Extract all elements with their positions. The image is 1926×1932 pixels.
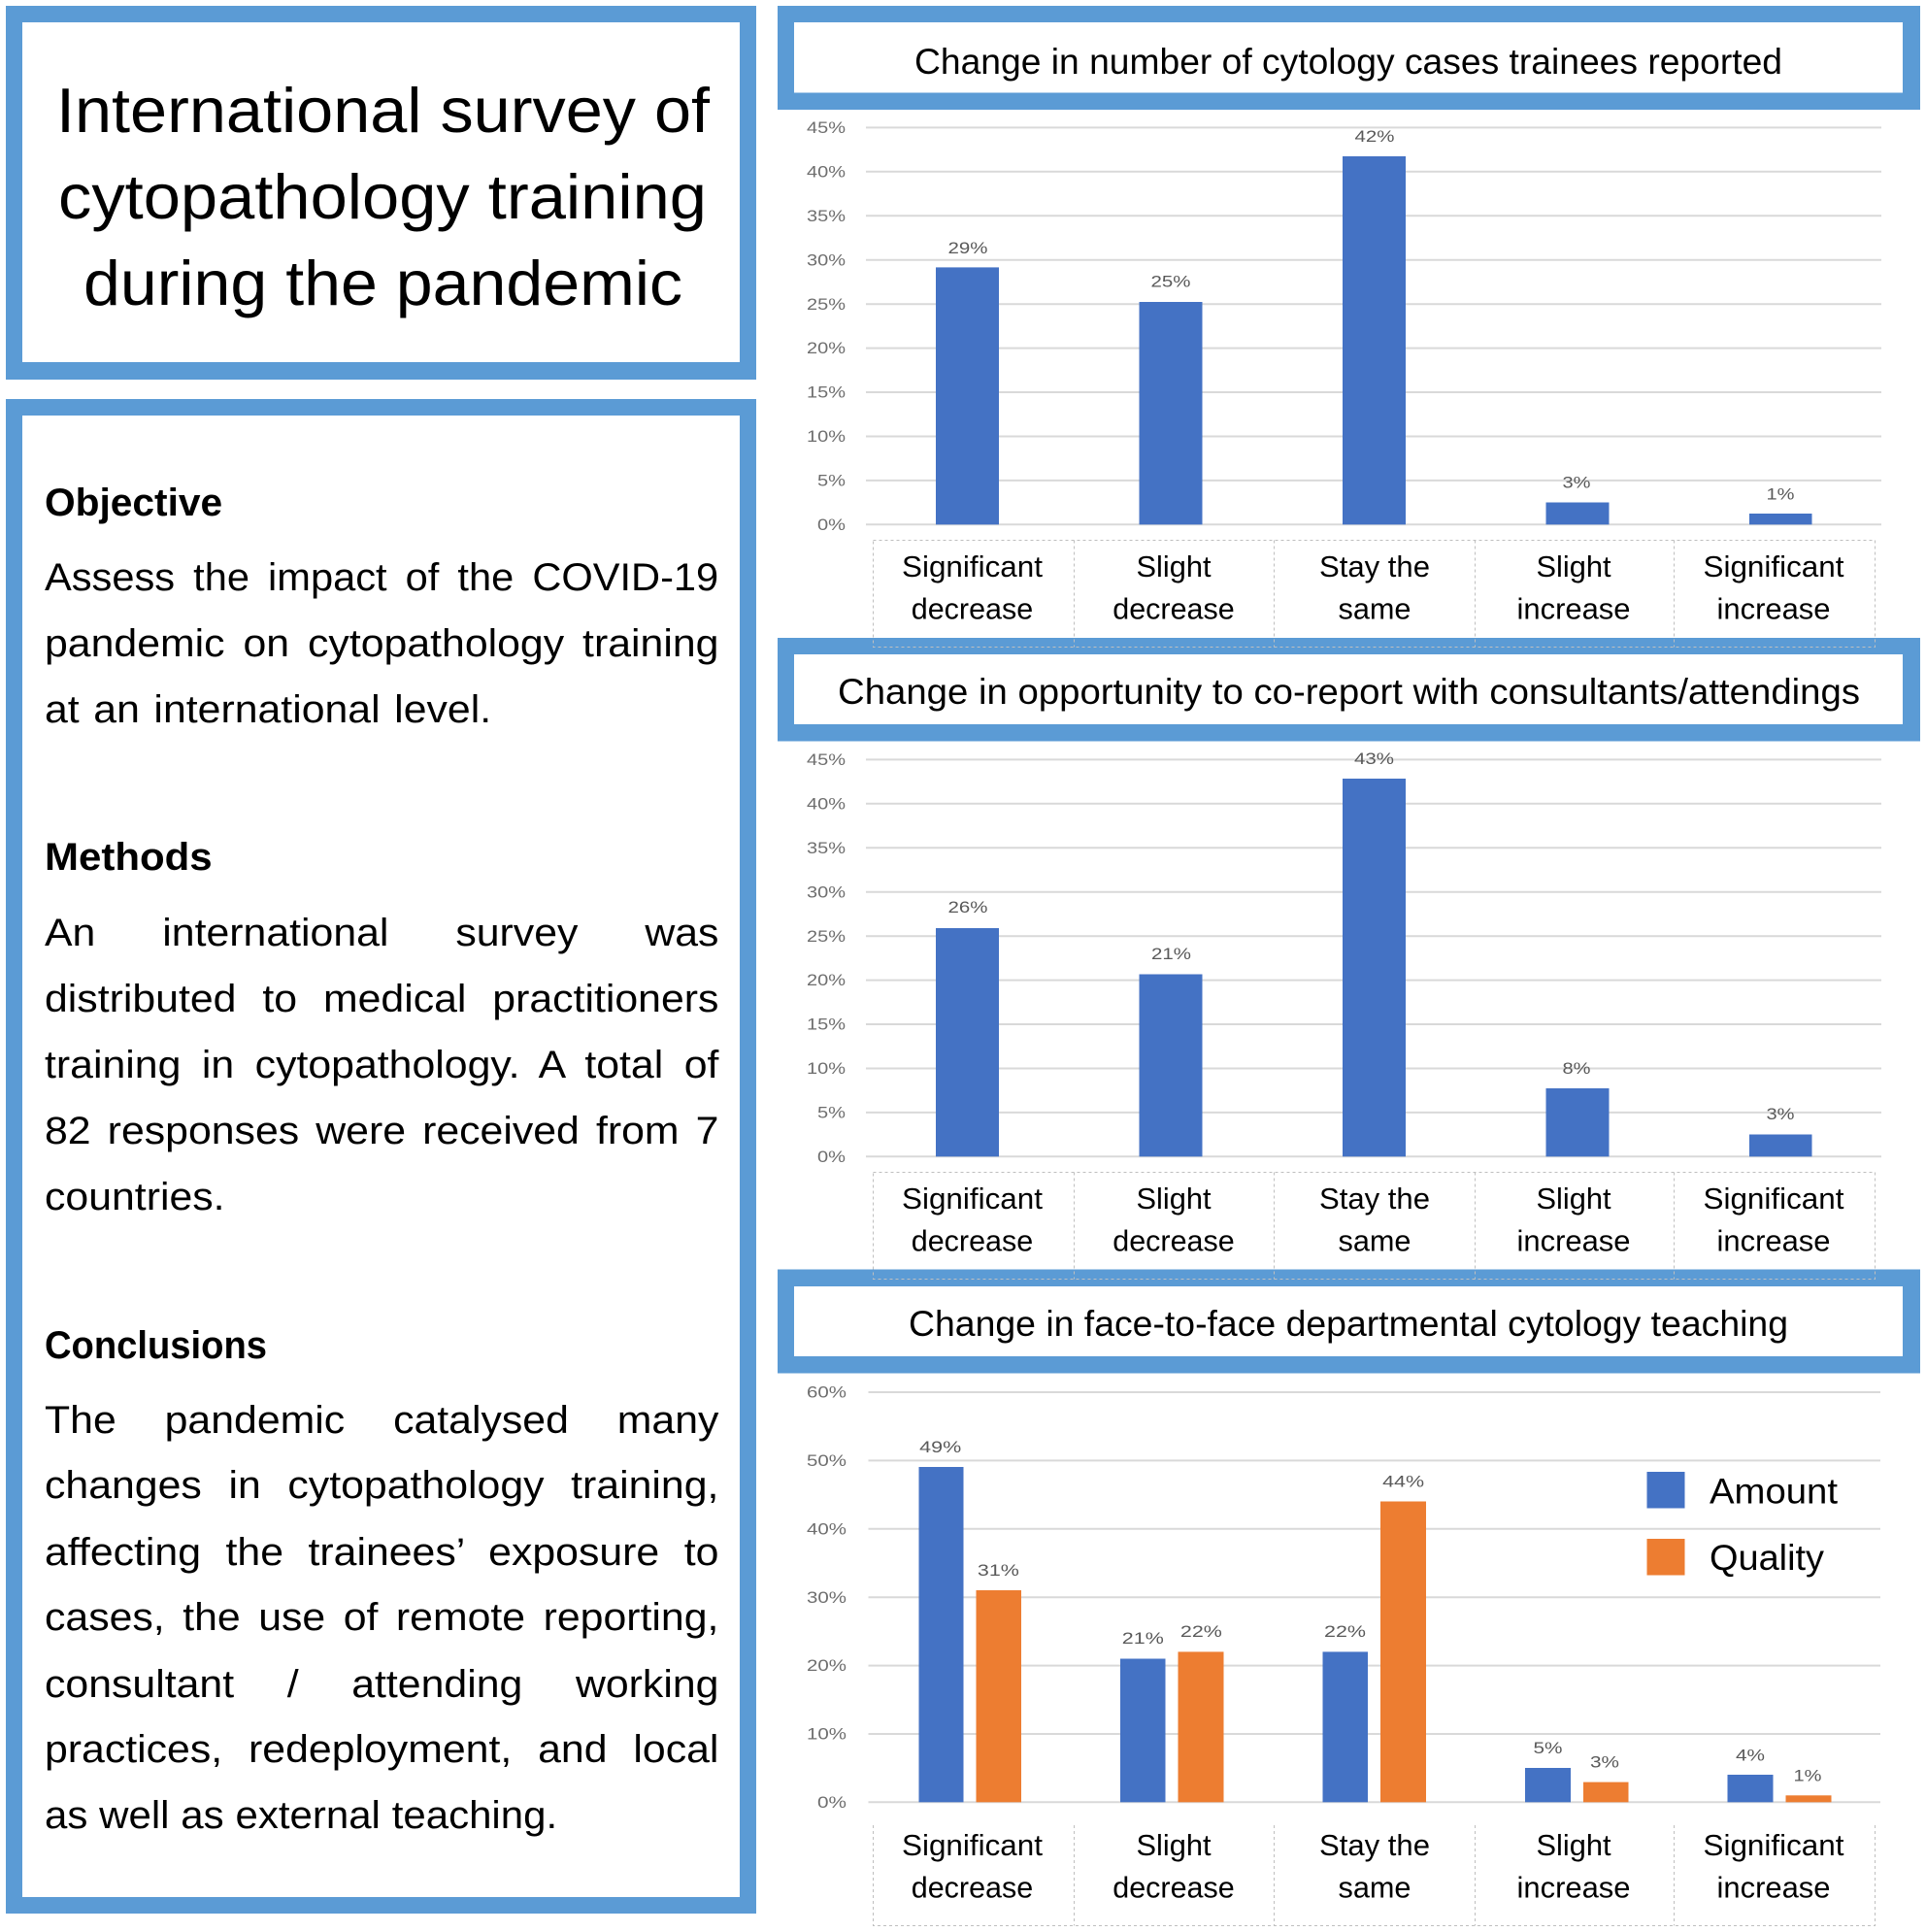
bar chart: face-to-face teaching amount and quality: 40% (807, 1519, 847, 1538)
bar chart: opportunity to co-report: decrease (1112, 1223, 1235, 1258)
header: chart 3 title (778, 1270, 1920, 1373)
text: methods body: training in cytopathology. A total of (45, 1044, 718, 1086)
bar chart: opportunity to co-report: 26% (947, 898, 988, 916)
bar chart: number of cytology cases: same (1338, 592, 1411, 625)
header: chart 1 title (778, 6, 1920, 110)
panel: title (6, 6, 756, 380)
heading: methods: Methods (45, 836, 212, 879)
bar chart: face-to-face teaching amount and quality: same (1338, 1870, 1411, 1905)
bar chart: number of cytology cases: 15% (807, 383, 846, 402)
bar chart: number of cytology cases: 35% (807, 207, 846, 225)
text: objective body: pandemic on cytopathology training (45, 622, 718, 665)
header: chart 1 title: Change in number of cytology cases trainees reported (914, 42, 1782, 82)
title: International survey of (56, 75, 711, 146)
bar chart: number of cytology cases: 40% (807, 162, 846, 181)
bar chart: face-to-face teaching amount and quality: increase (1716, 1870, 1831, 1905)
bar chart: opportunity to co-report: Significant (1703, 1182, 1844, 1216)
bar chart: opportunity to co-report: 25% (807, 927, 846, 946)
bar chart: face-to-face teaching amount and quality: Stay the (1319, 1828, 1430, 1862)
bar chart: opportunity to co-report: same (1338, 1223, 1411, 1258)
text: methods body: distributed to medical practitioners (45, 978, 718, 1020)
bar chart: number of cytology cases: 3% (1563, 474, 1590, 491)
bar chart: number of cytology cases: 10% (807, 427, 846, 446)
text: objective body: at an international level. (45, 688, 491, 731)
bar chart: opportunity to co-report: Stay the (1319, 1182, 1430, 1216)
bar chart: number of cytology cases: 29% (947, 239, 988, 257)
bar chart: face-to-face teaching amount and quality: 3% (1590, 1753, 1619, 1771)
bar chart: face-to-face teaching amount and quality: Significant (902, 1828, 1043, 1862)
bar chart: number of cytology cases: 45% (807, 118, 846, 137)
bar chart: number of cytology cases: Slight (1136, 550, 1212, 583)
bar chart: opportunity to co-report: 35% (807, 839, 846, 857)
bar chart: opportunity to co-report: 5% (817, 1103, 846, 1122)
bar chart: opportunity to co-report: 43% (1354, 749, 1394, 768)
bar chart: number of cytology cases: 42% (1355, 127, 1394, 146)
bar chart: face-to-face teaching amount and quality: 49% (919, 1438, 961, 1456)
bar chart: number of cytology cases: decrease (1112, 592, 1235, 625)
bar chart: face-to-face teaching amount and quality (807, 1382, 1880, 1926)
bar chart: face-to-face teaching amount and quality: 1% (1794, 1767, 1821, 1784)
bar chart: face-to-face teaching amount and quality: Slight (1536, 1828, 1611, 1862)
header: chart 2 title (778, 638, 1920, 742)
bar chart: face-to-face teaching amount and quality: 31% (978, 1561, 1019, 1580)
bar chart: opportunity to co-report: 3% (1767, 1105, 1794, 1123)
heading: conclusions: Conclusions (45, 1324, 266, 1367)
text: conclusions body: The pandemic catalysed many (45, 1399, 718, 1442)
bar chart: opportunity to co-report: 0% (817, 1148, 846, 1166)
text: conclusions body: affecting the trainees’ exposure to (45, 1531, 718, 1574)
section: conclusions (45, 1324, 718, 1837)
bar chart: number of cytology cases: 20% (807, 339, 846, 357)
bar chart: face-to-face teaching amount and quality: Slight (1136, 1828, 1212, 1862)
title (56, 75, 711, 318)
text: objective body (45, 556, 718, 731)
bar chart: opportunity to co-report (807, 749, 1881, 1280)
bar chart: face-to-face teaching amount and quality: 44% (1382, 1472, 1424, 1491)
bar chart: opportunity to co-report: 30% (807, 883, 846, 901)
heading: objective: Objective (45, 482, 222, 524)
header: chart 2 title: Change in opportunity to co-report with consultants/attendings (838, 672, 1860, 712)
legend: Quality (1710, 1538, 1825, 1578)
text: objective body: Assess the impact of the COVID-19 (45, 556, 718, 599)
header: chart 3 title: Change in face-to-face departmental cytology teaching (909, 1304, 1788, 1344)
text: methods body: An international survey was (45, 912, 718, 954)
bar chart: number of cytology cases: increase (1716, 592, 1831, 625)
bar chart: face-to-face teaching amount and quality: 4% (1736, 1746, 1765, 1765)
bar chart: number of cytology cases (807, 118, 1881, 647)
bar chart: face-to-face teaching amount and quality: 10% (807, 1725, 847, 1744)
bar chart: number of cytology cases: decrease (912, 592, 1033, 625)
bar chart: number of cytology cases: Stay the (1319, 550, 1430, 583)
bar chart: face-to-face teaching amount and quality: 30% (807, 1588, 847, 1607)
bar chart: number of cytology cases: Slight (1536, 550, 1611, 583)
text: methods body: 82 responses were received from 7 (45, 1110, 718, 1152)
text: methods body (45, 912, 718, 1218)
bar chart: number of cytology cases: increase (1516, 592, 1631, 625)
text: conclusions body: as well as external teaching. (45, 1794, 557, 1837)
bar chart: opportunity to co-report: increase (1716, 1223, 1831, 1258)
bar chart: number of cytology cases: 1% (1767, 485, 1794, 503)
text: conclusions body: practices, redeployment, and local (45, 1728, 718, 1771)
bar chart: face-to-face teaching amount and quality: 60% (807, 1382, 847, 1402)
bar chart: opportunity to co-report: 8% (1563, 1059, 1590, 1078)
bar chart: number of cytology cases: 25% (1151, 272, 1190, 291)
section: objective (45, 482, 718, 731)
bar chart: face-to-face teaching amount and quality: increase (1516, 1870, 1631, 1905)
section: methods (45, 836, 718, 1218)
bar chart: opportunity to co-report: decrease (912, 1223, 1033, 1258)
bar chart: number of cytology cases: 5% (817, 472, 846, 489)
bar chart: opportunity to co-report: 45% (807, 750, 846, 769)
bar chart: face-to-face teaching amount and quality: 21% (1122, 1629, 1164, 1648)
bar chart: face-to-face teaching amount and quality: decrease (912, 1870, 1033, 1905)
bar chart: opportunity to co-report: 21% (1151, 945, 1191, 963)
bar chart: face-to-face teaching amount and quality: 5% (1534, 1739, 1563, 1757)
bar chart: face-to-face teaching amount and quality: Significant (1703, 1828, 1844, 1862)
text: conclusions body (45, 1399, 718, 1837)
bar chart: face-to-face teaching amount and quality: 0% (817, 1793, 847, 1812)
panel: abstract text (6, 399, 756, 1914)
bar chart: face-to-face teaching amount and quality: 22% (1180, 1622, 1222, 1641)
bar chart: opportunity to co-report: Significant (902, 1182, 1043, 1216)
bar chart: number of cytology cases: Significant (1703, 550, 1844, 583)
bar chart: opportunity to co-report: 15% (807, 1016, 846, 1034)
title: cytopathology training (58, 161, 707, 232)
text: conclusions body: changes in cytopathology training, (45, 1464, 718, 1507)
bar chart: face-to-face teaching amount and quality: 22% (1324, 1622, 1366, 1641)
bar chart: opportunity to co-report: 20% (807, 971, 846, 989)
bar chart: number of cytology cases: 25% (807, 295, 846, 314)
bar chart: opportunity to co-report: increase (1516, 1223, 1631, 1258)
bar chart: opportunity to co-report: Slight (1536, 1182, 1611, 1216)
bar chart: number of cytology cases: 0% (817, 516, 846, 534)
legend (1646, 1472, 1839, 1578)
bar chart: face-to-face teaching amount and quality: 50% (807, 1451, 847, 1470)
title: during the pandemic (83, 248, 682, 318)
bar chart: face-to-face teaching amount and quality: decrease (1112, 1870, 1235, 1905)
bar chart: face-to-face teaching amount and quality: 20% (807, 1656, 847, 1675)
text: conclusions body: consultant / attending working (45, 1663, 718, 1706)
bar chart: number of cytology cases: 30% (807, 250, 846, 269)
text: methods body: countries. (45, 1176, 224, 1218)
bar chart: opportunity to co-report: 40% (807, 794, 846, 813)
bar chart: number of cytology cases: Significant (902, 550, 1043, 583)
text: conclusions body: cases, the use of remote reporting, (45, 1596, 718, 1639)
bar chart: opportunity to co-report: 10% (807, 1059, 846, 1078)
bar chart: opportunity to co-report: Slight (1136, 1182, 1212, 1216)
legend: Amount (1710, 1472, 1839, 1512)
